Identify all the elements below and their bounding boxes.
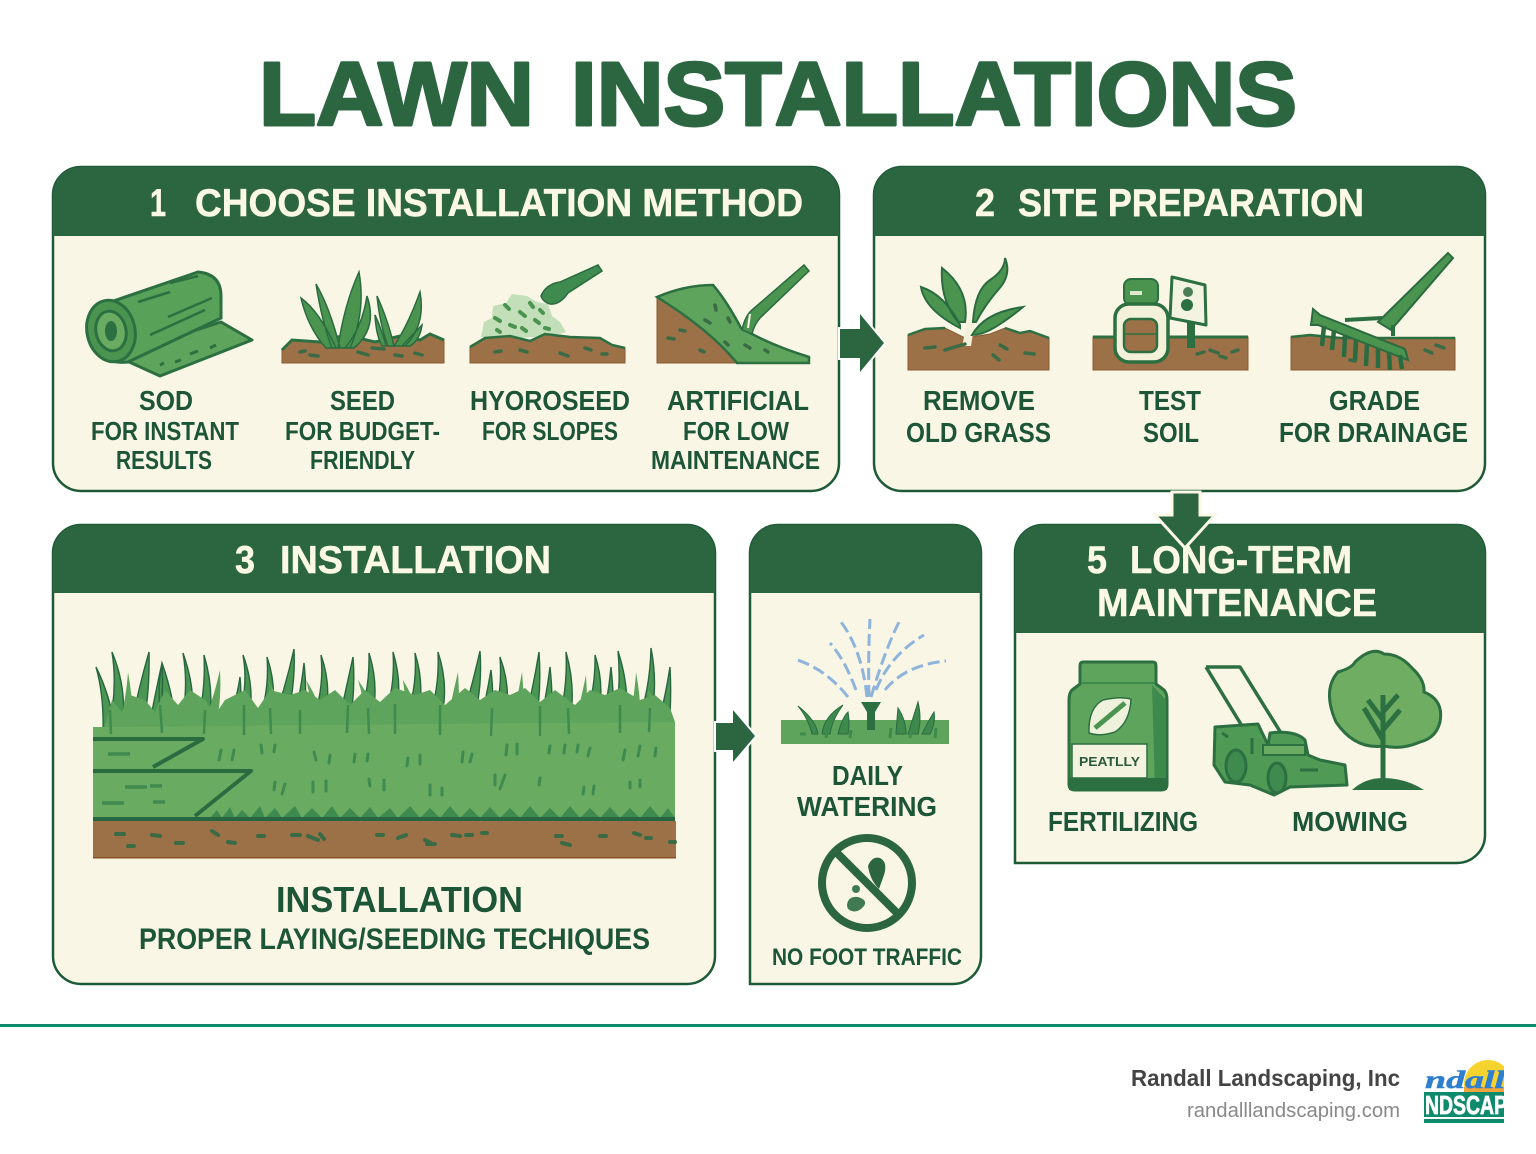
panel: long-term maintenance [1015, 492, 1485, 863]
icon: grade rake [1291, 253, 1455, 370]
icon: seed [282, 272, 444, 363]
title: INSTALLATIONS [571, 45, 1297, 145]
footer company name: Randall Landscaping, Inc [1131, 1065, 1400, 1091]
panel: aftercare [750, 525, 981, 984]
seed label: FOR BUDGET- [285, 418, 440, 446]
artificial label [651, 385, 820, 475]
grade label [1279, 385, 1468, 448]
test label [1139, 385, 1201, 448]
arrow: step 2 to step 5 [1155, 492, 1215, 548]
fertilizing label: FERTILIZING [1048, 806, 1198, 837]
icon: remove old grass [908, 258, 1049, 370]
daily watering label: WATERING [797, 791, 937, 822]
panel 1 header [53, 167, 839, 236]
artificial label: ARTIFICIAL [667, 385, 809, 416]
hydroseed label: FOR SLOPES [482, 418, 618, 446]
icon: no foot traffic [822, 838, 912, 928]
panel 2 heading: 2 [975, 182, 995, 225]
grade label: GRADE [1329, 385, 1420, 416]
icon: sprinkler [781, 619, 949, 744]
icon: fertilizer bag: PEATLLY [1079, 755, 1141, 769]
logo [1424, 1060, 1507, 1123]
panel: site preparation [874, 167, 1485, 491]
ground tufts [210, 806, 675, 818]
remove label: OLD GRASS [906, 417, 1051, 448]
sod label: RESULTS [116, 447, 212, 475]
mowing label: MOWING [1292, 806, 1408, 837]
icon: lawn mower [1206, 667, 1347, 795]
icon: artificial turf [657, 265, 809, 363]
panel 5 heading: LONG-TERM [1130, 539, 1352, 582]
artificial label: MAINTENANCE [651, 447, 820, 475]
daily watering label: DAILY [832, 760, 903, 791]
panel 1 heading: 1 [150, 182, 166, 225]
title: LAWN [259, 45, 534, 145]
hydroseed label [470, 385, 630, 446]
seed label: SEED [330, 385, 395, 416]
installation caption [139, 879, 650, 956]
daily watering label [797, 760, 937, 822]
lighter blades [118, 670, 664, 732]
test label: SOIL [1143, 417, 1199, 448]
panel 2 heading: SITE PREPARATION [1018, 182, 1364, 225]
arrow: step 1 to step 2 [840, 314, 884, 372]
icon: tree [1329, 651, 1441, 790]
seed label: FRIENDLY [310, 447, 415, 475]
icon: sod roll [81, 272, 252, 376]
installation caption: INSTALLATION [276, 879, 523, 920]
artificial label: FOR LOW [683, 418, 790, 446]
panel 5 heading [1087, 539, 1377, 625]
panel: installation [53, 525, 715, 984]
panel 5 heading: MAINTENANCE [1097, 582, 1377, 625]
panel 5 heading: 5 [1087, 539, 1107, 582]
logo: ndall [1425, 1067, 1505, 1094]
seed label [285, 385, 440, 475]
hydroseed label: HYOROSEED [470, 385, 630, 416]
icon: test soil [1093, 277, 1248, 370]
grass blades [96, 648, 671, 732]
illustration: lawn cross-section [93, 648, 676, 858]
title [259, 45, 1297, 145]
remove label: REMOVE [923, 385, 1035, 416]
footer divider [0, 1024, 1536, 1027]
no foot traffic label: NO FOOT TRAFFIC [772, 944, 962, 971]
panel 3 heading: 3 [235, 539, 255, 582]
sod strips [93, 739, 251, 816]
turf body [93, 722, 675, 820]
blade mass [104, 688, 675, 732]
sod label [91, 385, 239, 475]
remove label [906, 385, 1051, 448]
arrow: step 3 to step 4 [716, 710, 755, 762]
sod label: FOR INSTANT [91, 418, 239, 446]
icon: hydroseed [470, 265, 625, 363]
sod label: SOD [139, 385, 193, 416]
panel 1 heading: CHOOSE INSTALLATION METHOD [195, 182, 803, 225]
panel 3 heading: INSTALLATION [280, 539, 551, 582]
icon: fertilizer bag [1069, 662, 1167, 790]
turf flecks [219, 744, 656, 795]
soil layer [93, 821, 676, 858]
grade label: FOR DRAINAGE [1279, 417, 1468, 448]
panel 4 header [750, 525, 981, 593]
panel 3 header [53, 525, 715, 593]
panel 2 header [874, 167, 1485, 236]
panel 5 header [1015, 525, 1485, 633]
blade bases [110, 704, 650, 736]
panel: choose installation method [53, 167, 839, 491]
installation caption: PROPER LAYING/SEEDING TECHIQUES [139, 923, 650, 956]
footer website: randalllandscaping.com [1187, 1100, 1400, 1122]
test label: TEST [1139, 385, 1201, 416]
